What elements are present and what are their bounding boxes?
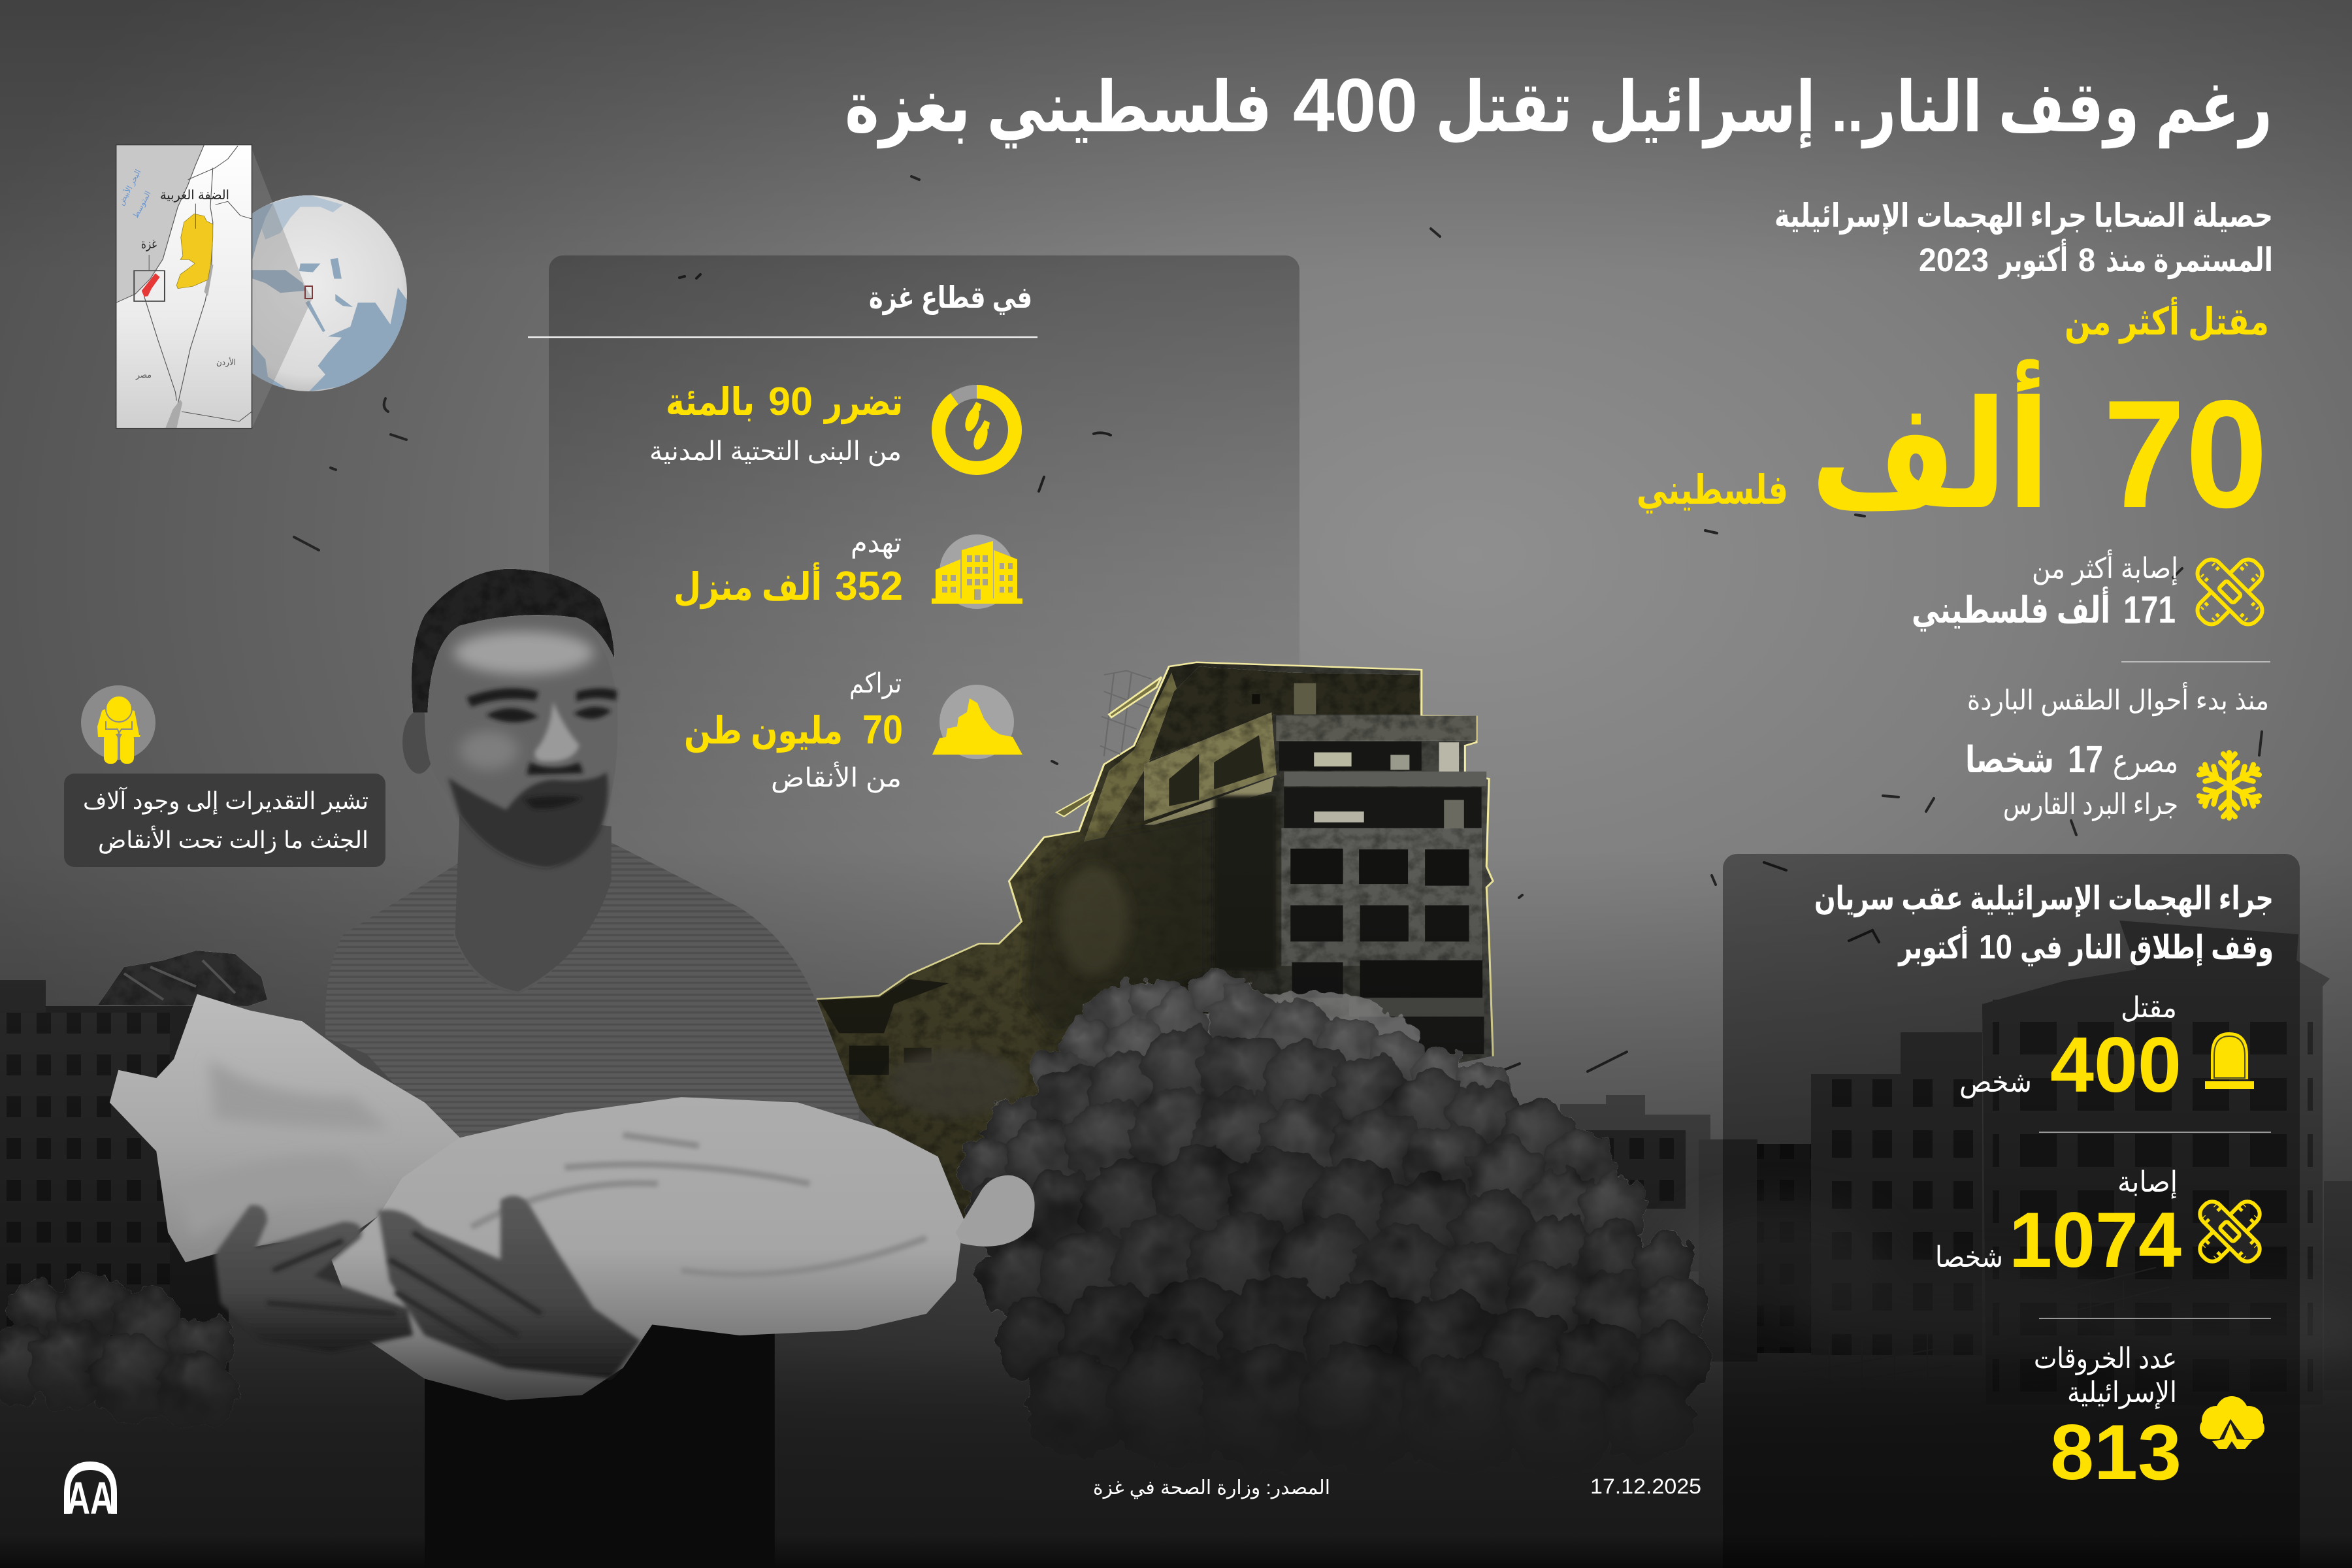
heading: in Gaza Strip: في قطاع غزة bbox=[869, 280, 1032, 315]
map: West Bank bbox=[176, 214, 213, 289]
map frame bbox=[116, 145, 252, 429]
map labels: المتوسط bbox=[131, 189, 154, 220]
map: sea bbox=[116, 145, 204, 302]
icon: buildings bbox=[932, 534, 1022, 609]
title: فلسطيني بغزة bbox=[845, 67, 1272, 149]
stat: killed 400: 400 bbox=[2050, 1021, 2181, 1109]
total killed headline bbox=[1637, 297, 2269, 540]
subtitle: 2023 bbox=[1919, 242, 1989, 278]
title: 400 bbox=[1293, 63, 1418, 148]
man holding wrapped body bbox=[110, 569, 1035, 1568]
subtitle: أكتوبر bbox=[1998, 238, 2068, 280]
panel: after ceasefire bbox=[1723, 854, 2300, 1568]
map: borders bbox=[116, 145, 252, 421]
subtitle: 8 bbox=[2078, 242, 2095, 278]
stat: violations 813 bbox=[2034, 1343, 2181, 1496]
haze over buildings bbox=[1666, 1202, 2352, 1379]
stat: damage 90 percent bbox=[649, 380, 903, 466]
panel: Gaza Strip background bbox=[549, 255, 1299, 843]
logo: Anadolu AA: AA bbox=[67, 1473, 114, 1524]
stat: 352 thousand homes bbox=[674, 527, 903, 610]
dust haze bbox=[1196, 993, 1418, 1085]
heading: after ceasefire: وقف إطلاق النار في bbox=[2020, 929, 2274, 967]
stat: 70 million tons: من الأنقاض bbox=[771, 761, 902, 793]
map labels: مصر bbox=[135, 370, 152, 380]
map: dead sea and gulf bbox=[165, 265, 214, 429]
icon: ring with bombs 90 percent bbox=[938, 392, 1015, 468]
callout: bodies under rubble: تشير التقديرات إلى وجود آلاف bbox=[83, 786, 368, 815]
flying debris in the sky bbox=[294, 176, 2262, 1215]
icon: seated person under rubble bbox=[81, 685, 155, 764]
cheek highlight bbox=[460, 731, 518, 770]
left smoke bbox=[0, 1271, 235, 1431]
heading: after ceasefire: 10 bbox=[1979, 928, 2012, 966]
map: Gaza box bbox=[134, 270, 165, 301]
title bbox=[845, 63, 2272, 149]
forehead highlight bbox=[454, 631, 594, 674]
cold weather text: مصرع bbox=[2113, 743, 2178, 780]
stat: injured 1074: إصابة bbox=[2117, 1166, 2178, 1199]
map labels: الضفة الغربية bbox=[160, 188, 229, 203]
injured text: 171 bbox=[2123, 589, 2176, 631]
knot bbox=[956, 1175, 1035, 1247]
neck bbox=[455, 810, 612, 992]
small locator box bbox=[305, 286, 312, 299]
stat: 70 million tons: مليون طن bbox=[684, 710, 843, 753]
icon: rubble mound bbox=[932, 685, 1022, 759]
map labels: غزة bbox=[141, 237, 157, 252]
cold weather text: جراء البرد القارس bbox=[2003, 789, 2178, 821]
map labels bbox=[116, 167, 236, 380]
map labels: الأردن bbox=[216, 357, 236, 368]
stat: violations 813: عدد الخروقات bbox=[2034, 1343, 2177, 1375]
icon: explosion cloud bbox=[2200, 1396, 2264, 1449]
icon: gravestone bbox=[2205, 1032, 2254, 1089]
cold weather text: منذ بدء أحوال الطقس الباردة bbox=[1967, 682, 2269, 716]
injured text: ألف فلسطيني bbox=[1912, 586, 2110, 632]
logo: Anadolu AA bbox=[64, 1462, 117, 1524]
subtitle: المستمرة منذ bbox=[2106, 242, 2273, 280]
injured text bbox=[1912, 549, 2178, 632]
total killed headline: ألف bbox=[1810, 359, 2050, 539]
source: المصدر: وزارة الصحة في غزة bbox=[1093, 1477, 1330, 1499]
wrapped body bbox=[331, 1097, 967, 1401]
icon: snowflake bbox=[2197, 753, 2262, 818]
eyes and brows bbox=[466, 689, 617, 809]
stat: violations 813: الإسرائيلية bbox=[2067, 1377, 2177, 1409]
locator globe bbox=[252, 195, 407, 391]
callout: bodies under rubble bbox=[64, 774, 385, 867]
stat: damage 90 percent: بالمئة bbox=[666, 381, 755, 423]
map labels: البحر الأبيض bbox=[116, 167, 144, 207]
trusses bbox=[1803, 1267, 2169, 1385]
stat: violations 813: 813 bbox=[2050, 1409, 2181, 1496]
callout: bodies under rubble: الجثث ما زالت تحت الأنقاض bbox=[98, 825, 368, 854]
subtitle bbox=[1774, 197, 2273, 280]
icon: bandage injured bbox=[2193, 555, 2267, 629]
stat: injured 1074: شخصا bbox=[1935, 1241, 2003, 1273]
locator map cone bbox=[252, 149, 312, 429]
left wrapped sheet bbox=[110, 994, 463, 1262]
total killed headline: مقتل أكثر من bbox=[2065, 297, 2269, 344]
stat: 352 thousand homes: تهدم bbox=[851, 527, 902, 559]
left ruined building bbox=[0, 951, 267, 1372]
face bbox=[421, 616, 617, 868]
lower body silhouette bbox=[425, 1324, 775, 1568]
cold weather text: 17 bbox=[2068, 738, 2103, 781]
man torso bbox=[325, 842, 859, 1205]
date: 17.12.2025 bbox=[1590, 1475, 1701, 1498]
heading: after ceasefire bbox=[1814, 880, 2274, 967]
collapsing building bbox=[817, 662, 1493, 1246]
map: Gaza bbox=[142, 273, 160, 297]
stat: 352 thousand homes: ألف منزل bbox=[674, 562, 822, 610]
stat: damage 90 percent: تضرر bbox=[823, 381, 903, 425]
stat: 70 million tons: تراكم bbox=[849, 668, 902, 700]
cold weather text: شخصا bbox=[1965, 739, 2054, 780]
hands bbox=[215, 1196, 640, 1379]
stat: 70 million tons bbox=[684, 668, 903, 793]
inset map bbox=[116, 145, 252, 429]
heading: after ceasefire: أكتوبر bbox=[1897, 926, 1968, 967]
total killed headline: فلسطيني bbox=[1637, 468, 1788, 514]
beard bbox=[448, 772, 608, 868]
hair bbox=[412, 569, 614, 712]
smoke cloud bbox=[958, 964, 1712, 1477]
stat: 352 thousand homes: 352 bbox=[835, 564, 903, 609]
rubble ground bbox=[0, 1346, 2352, 1568]
injured text: إصابة أكثر من bbox=[2032, 549, 2178, 585]
stat: damage 90 percent: من البنى التحتية المدنية bbox=[649, 437, 902, 466]
right background buildings bbox=[1560, 921, 2352, 1405]
stat: killed 400 bbox=[1959, 992, 2181, 1109]
diagonal slab bbox=[1084, 673, 1179, 841]
stat: injured 1074: 1074 bbox=[2009, 1196, 2181, 1284]
stat: killed 400: شخص bbox=[1959, 1066, 2032, 1099]
total killed headline: 70 bbox=[2103, 368, 2268, 540]
stat: 70 million tons: 70 bbox=[862, 708, 903, 753]
stat: damage 90 percent: 90 bbox=[768, 380, 813, 423]
cold weather text bbox=[1965, 682, 2269, 821]
distance shadow over scene bbox=[0, 849, 2352, 1568]
stat: injured 1074 bbox=[1935, 1166, 2181, 1284]
stat: killed 400: مقتل bbox=[2121, 992, 2177, 1024]
ear bbox=[402, 711, 435, 774]
icon: bandage injured 1074 bbox=[2196, 1198, 2264, 1266]
